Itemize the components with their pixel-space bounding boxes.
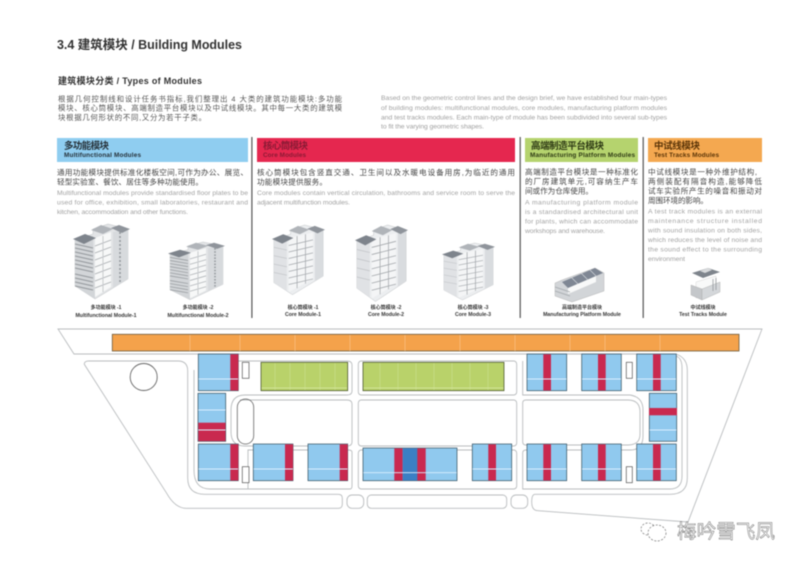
label: test tracks: 中试线模块 bbox=[690, 304, 716, 311]
header: manufacturing bbox=[525, 138, 638, 162]
text: test tracks description: environment bbox=[648, 256, 685, 263]
label: module 1: 多功能模块 -1 bbox=[91, 304, 122, 311]
text: manufacturing description: A manufacturing platform module bbox=[525, 200, 638, 206]
orange test track bar bbox=[112, 334, 739, 351]
text: manufacturing description: 的厂房建筑单元,可容纳生产车 bbox=[525, 176, 638, 186]
text: test tracks description: 中试线模块是一种外维护结构, bbox=[648, 166, 757, 176]
green platform 1 bbox=[261, 362, 348, 391]
building: core module 1 bbox=[272, 225, 325, 295]
header: manufacturing: 高端制造平台模块 bbox=[531, 140, 604, 152]
text: manufacturing description: 间或作为仓库使用。 bbox=[525, 186, 593, 196]
module: top right 3 bbox=[637, 354, 676, 391]
label: core 2 bbox=[368, 304, 404, 318]
text: multifunctional description: kitchen, accommodation and other functions. bbox=[57, 209, 188, 216]
label: module 2: Multifunctional Module-2 bbox=[167, 313, 229, 319]
intro text: English: Based on the geometric control lines and the design brief, we have established four main-types bbox=[381, 95, 668, 102]
label: test tracks bbox=[679, 304, 727, 318]
multifunctional + core module: top-left bbox=[198, 354, 238, 391]
text: core description: Core modules contain vertical circulation, bathrooms and service room to serve the bbox=[257, 190, 515, 197]
watermark text: 梅吟雪飞凤 bbox=[677, 521, 775, 543]
text: test tracks description: 试车实验所产生的噪音和振动对 bbox=[648, 186, 762, 196]
text: core description: 核心筒模块包含竖直交通、卫生间以及水暖电设备用房,为临近的通用 bbox=[257, 167, 515, 177]
intro text: English: to fit the varying geometric shapes. bbox=[381, 124, 484, 130]
header: core bbox=[257, 138, 515, 162]
building: manufacturing platform bbox=[555, 268, 604, 302]
module: bottom-left 1 bbox=[198, 444, 238, 481]
text: core description: 功能模块提供服务。 bbox=[257, 176, 327, 186]
label: module 2 bbox=[167, 304, 229, 319]
header: multifunctional: Multifunctional Modules bbox=[64, 152, 141, 159]
label: core 1: 核心筒模块 -1 bbox=[288, 304, 319, 311]
header: core: Core Modules bbox=[263, 152, 306, 159]
label: core 3 bbox=[455, 304, 491, 318]
text: test tracks description: with sound insulation on both sides, bbox=[647, 228, 762, 234]
text: manufacturing description bbox=[524, 166, 638, 235]
text: core description bbox=[257, 167, 515, 206]
module: top right 1 bbox=[527, 354, 567, 391]
intro text: English bbox=[381, 95, 668, 130]
header: multifunctional: 多功能模块 bbox=[64, 140, 109, 152]
building: core module 3 bbox=[442, 243, 495, 300]
label: core 1: Core Module-1 bbox=[285, 312, 321, 318]
building: multifunctional module 1 bbox=[73, 224, 130, 299]
header: manufacturing: Manufacturing Platform Modules bbox=[530, 152, 635, 159]
divider 3 bbox=[643, 137, 644, 318]
title: 3.4 建筑模块 / Building Modules bbox=[57, 37, 242, 52]
label: manufacturing bbox=[543, 304, 621, 318]
module: bottom-left 2 bbox=[253, 444, 293, 481]
watermark bbox=[641, 521, 775, 543]
text: test tracks description: maintenance structure installed bbox=[648, 218, 762, 225]
oval atrium bbox=[237, 399, 254, 444]
intro text: English: of building modules: multifunctional modules, core modules, manufacturing platform modules bbox=[381, 105, 668, 112]
module: top right 2 bbox=[582, 354, 621, 391]
building: test tracks bbox=[691, 268, 720, 300]
icon: chat bubbles bbox=[641, 523, 666, 541]
module: left middle bbox=[198, 393, 226, 441]
text: multifunctional description: 轻型实验室、餐饮、居住等多种功能使用。 bbox=[57, 176, 203, 186]
building: multifunctional module 2 bbox=[168, 242, 225, 300]
section heading: 建筑模块分类 / Types of Modules bbox=[58, 75, 202, 86]
intro text: Chinese bbox=[58, 94, 343, 122]
label: core 2: Core Module-2 bbox=[368, 312, 404, 318]
text: manufacturing description: workshops and warehouse. bbox=[524, 228, 605, 235]
text: test tracks description bbox=[647, 166, 762, 263]
divider 2 bbox=[520, 137, 521, 318]
module: bottom 7 bbox=[582, 444, 621, 481]
module: bottom-left 3 bbox=[308, 444, 348, 481]
label: manufacturing: Manufacturing Platform Module bbox=[543, 312, 621, 318]
label: core 3: 核心筒模块 -3 bbox=[458, 304, 489, 311]
text: core description: adjacent multifunction modules. bbox=[257, 200, 350, 206]
text: test tracks description: the sound effect to the surrounding bbox=[648, 246, 762, 254]
module: bottom 8 bbox=[637, 444, 676, 481]
intro text: English: and test tracks modules. Each main-type of module has been subdivided into several sub-types bbox=[381, 114, 668, 122]
green platform 2 bbox=[363, 362, 504, 391]
text: multifunctional description: 通用功能模块提供标准化楼板空间,可作为办公、展览、 bbox=[57, 167, 248, 177]
label: manufacturing: 高端制造平台模块 bbox=[562, 304, 602, 311]
panel: core modules bbox=[257, 138, 515, 318]
label: test tracks: Test Tracks Module bbox=[679, 312, 727, 318]
module: right middle bbox=[649, 393, 677, 441]
text: manufacturing description: is a standardised architectural unit bbox=[525, 209, 638, 216]
intro text: Chinese: 块根据几何形状的不同,又分为若干子类。 bbox=[58, 113, 206, 122]
text: manufacturing description: 高端制造平台模块是一种标准化 bbox=[525, 166, 638, 176]
label: module 1 bbox=[75, 304, 137, 319]
header: core: 核心筒模块 bbox=[263, 140, 308, 152]
text: test tracks description: 两侧装配有隔音构造,能够降低 bbox=[648, 176, 762, 186]
round plaza bbox=[130, 364, 157, 390]
header: multifunctional bbox=[57, 138, 248, 162]
text: multifunctional description: Multifunctional modules provide standardised floor plates to be bbox=[57, 190, 248, 197]
text: manufacturing description: for plants, which can accommodate bbox=[525, 218, 638, 226]
site plan bbox=[58, 329, 762, 522]
intro text: Chinese: 模块、核心筒模块、高端制造平台模块以及中试线模块。其中每一大类的建筑模 bbox=[58, 104, 343, 112]
header: test tracks bbox=[648, 138, 762, 162]
roads bbox=[58, 329, 762, 522]
module: bottom 6 bbox=[527, 444, 567, 481]
label: core 3: Core Module-3 bbox=[455, 312, 491, 318]
label: module 1: Multifunctional Module-1 bbox=[75, 313, 137, 319]
text: test tracks description: 周围环境的影响。 bbox=[648, 195, 708, 205]
divider 1 bbox=[251, 137, 252, 318]
header: test tracks: 中试线模块 bbox=[654, 140, 700, 152]
panel: multifunctional modules bbox=[57, 138, 248, 319]
label: core 2: 核心筒模块 -2 bbox=[371, 304, 402, 311]
module: long bottom centre bbox=[363, 448, 457, 481]
module: bottom 5 bbox=[472, 444, 512, 481]
small service rooms bbox=[242, 362, 632, 483]
text: test tracks description: A test track modules is an external bbox=[648, 208, 762, 216]
text: multifunctional description bbox=[57, 167, 248, 216]
text: test tracks description: which reduces the level of noise and bbox=[647, 237, 762, 244]
header: test tracks: Test Tracks Modules bbox=[654, 152, 719, 159]
text: multifunctional description: used for office, exhibition, small laboratories, restaurant and bbox=[57, 200, 248, 206]
label: core 1 bbox=[285, 304, 321, 318]
label: module 2: 多功能模块 -2 bbox=[183, 304, 214, 311]
panel: test tracks modules bbox=[647, 138, 762, 318]
building: core module 2 bbox=[355, 225, 408, 302]
intro text: Chinese: 根据几何控制线和设计任务书指标,我们整理出 4 大类的建筑功能模块:多功能 bbox=[58, 94, 343, 104]
panel: manufacturing platform modules bbox=[524, 138, 638, 318]
